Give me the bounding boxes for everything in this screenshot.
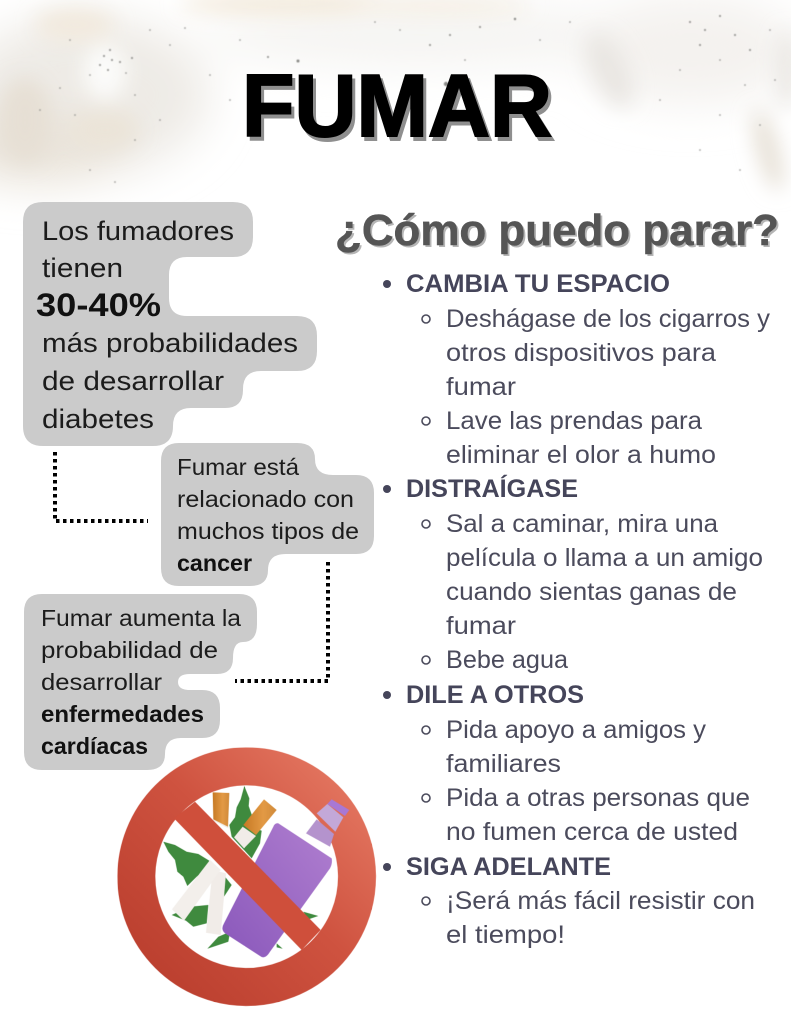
section: tell others: familiares <box>446 750 561 778</box>
section: distract yourself: Sal a caminar, mira una <box>446 510 718 538</box>
section: change your space <box>406 270 771 469</box>
connector: diabetes to cancer <box>55 452 148 521</box>
section: distract yourself: cuando sientas ganas de <box>446 578 737 606</box>
bubble: heart disease: cardíacas <box>41 733 148 759</box>
bubble: cancer: relacionado con <box>177 486 354 512</box>
section: tell others: Pida a otras personas que <box>446 784 750 812</box>
section: keep going: ¡Será más fácil resistir con <box>446 887 755 915</box>
section: keep going: el tiempo! <box>446 921 565 949</box>
list: how to stop smoking <box>383 270 771 949</box>
bubble: heart disease: probabilidad de <box>41 637 218 663</box>
icon part: leaves <box>163 786 318 949</box>
section: change your space: eliminar el olor a humo <box>446 441 716 469</box>
connector: cancer to heart disease <box>235 562 328 681</box>
section: keep going: SIGA ADELANTE <box>406 853 611 881</box>
panel: statistics bubbles <box>23 202 374 770</box>
icon part: prohibition ring <box>136 766 357 987</box>
section: change your space: CAMBIA TU ESPACIO <box>406 270 670 298</box>
icon part: cigarettes <box>172 792 277 935</box>
heading: how can I stop: ¿Cómo puedo parar? <box>337 208 781 257</box>
section: distract yourself: película o llama a un amigo <box>446 544 763 572</box>
icon: no smoking or vaping sign <box>136 766 357 987</box>
title: FUMAR <box>245 60 555 159</box>
bubble: diabetes: más probabilidades <box>42 328 298 358</box>
bubble: diabetes: Los fumadores <box>42 216 234 246</box>
bubble: diabetes: 30-40% <box>36 287 161 323</box>
title: FUMAR <box>242 56 552 155</box>
section: change your space: Deshágase de los cigarros y <box>446 305 771 333</box>
section: tell others: no fumen cerca de usted <box>446 818 738 846</box>
bubble: heart disease <box>24 594 257 770</box>
section: change your space: fumar <box>446 373 516 401</box>
bubble: diabetes: diabetes <box>42 404 154 434</box>
section: tell others <box>406 681 750 846</box>
bubble: heart disease: enfermedades <box>41 701 204 727</box>
section: change your space: otros dispositivos para <box>446 339 716 367</box>
bubble: diabetes: de desarrollar <box>42 366 224 396</box>
icon part: vape device <box>222 799 349 957</box>
section: change your space: Lave las prendas para <box>446 407 702 435</box>
section: distract yourself: Bebe agua <box>446 646 568 674</box>
bubble: cancer: muchos tipos de <box>177 518 359 544</box>
bubble: diabetes <box>23 202 317 446</box>
heading: how can I stop: ¿Cómo puedo parar? <box>335 206 779 255</box>
bubble: heart disease: desarrollar <box>41 669 162 695</box>
section: keep going <box>406 853 755 949</box>
bubble: cancer: Fumar está <box>177 454 299 480</box>
bubble: heart disease: Fumar aumenta la <box>41 605 241 631</box>
section: distract yourself: fumar <box>446 612 516 640</box>
section: tell others: Pida apoyo a amigos y <box>446 716 707 744</box>
icon part: prohibition slash <box>174 802 321 950</box>
section: tell others: DILE A OTROS <box>406 681 584 709</box>
section: distract yourself: DISTRAÍGASE <box>406 474 578 503</box>
bubble: cancer <box>161 443 374 586</box>
section: distract yourself <box>406 474 763 674</box>
bubble: cancer: cancer <box>177 550 252 576</box>
bubble: diabetes: tienen <box>42 253 123 283</box>
